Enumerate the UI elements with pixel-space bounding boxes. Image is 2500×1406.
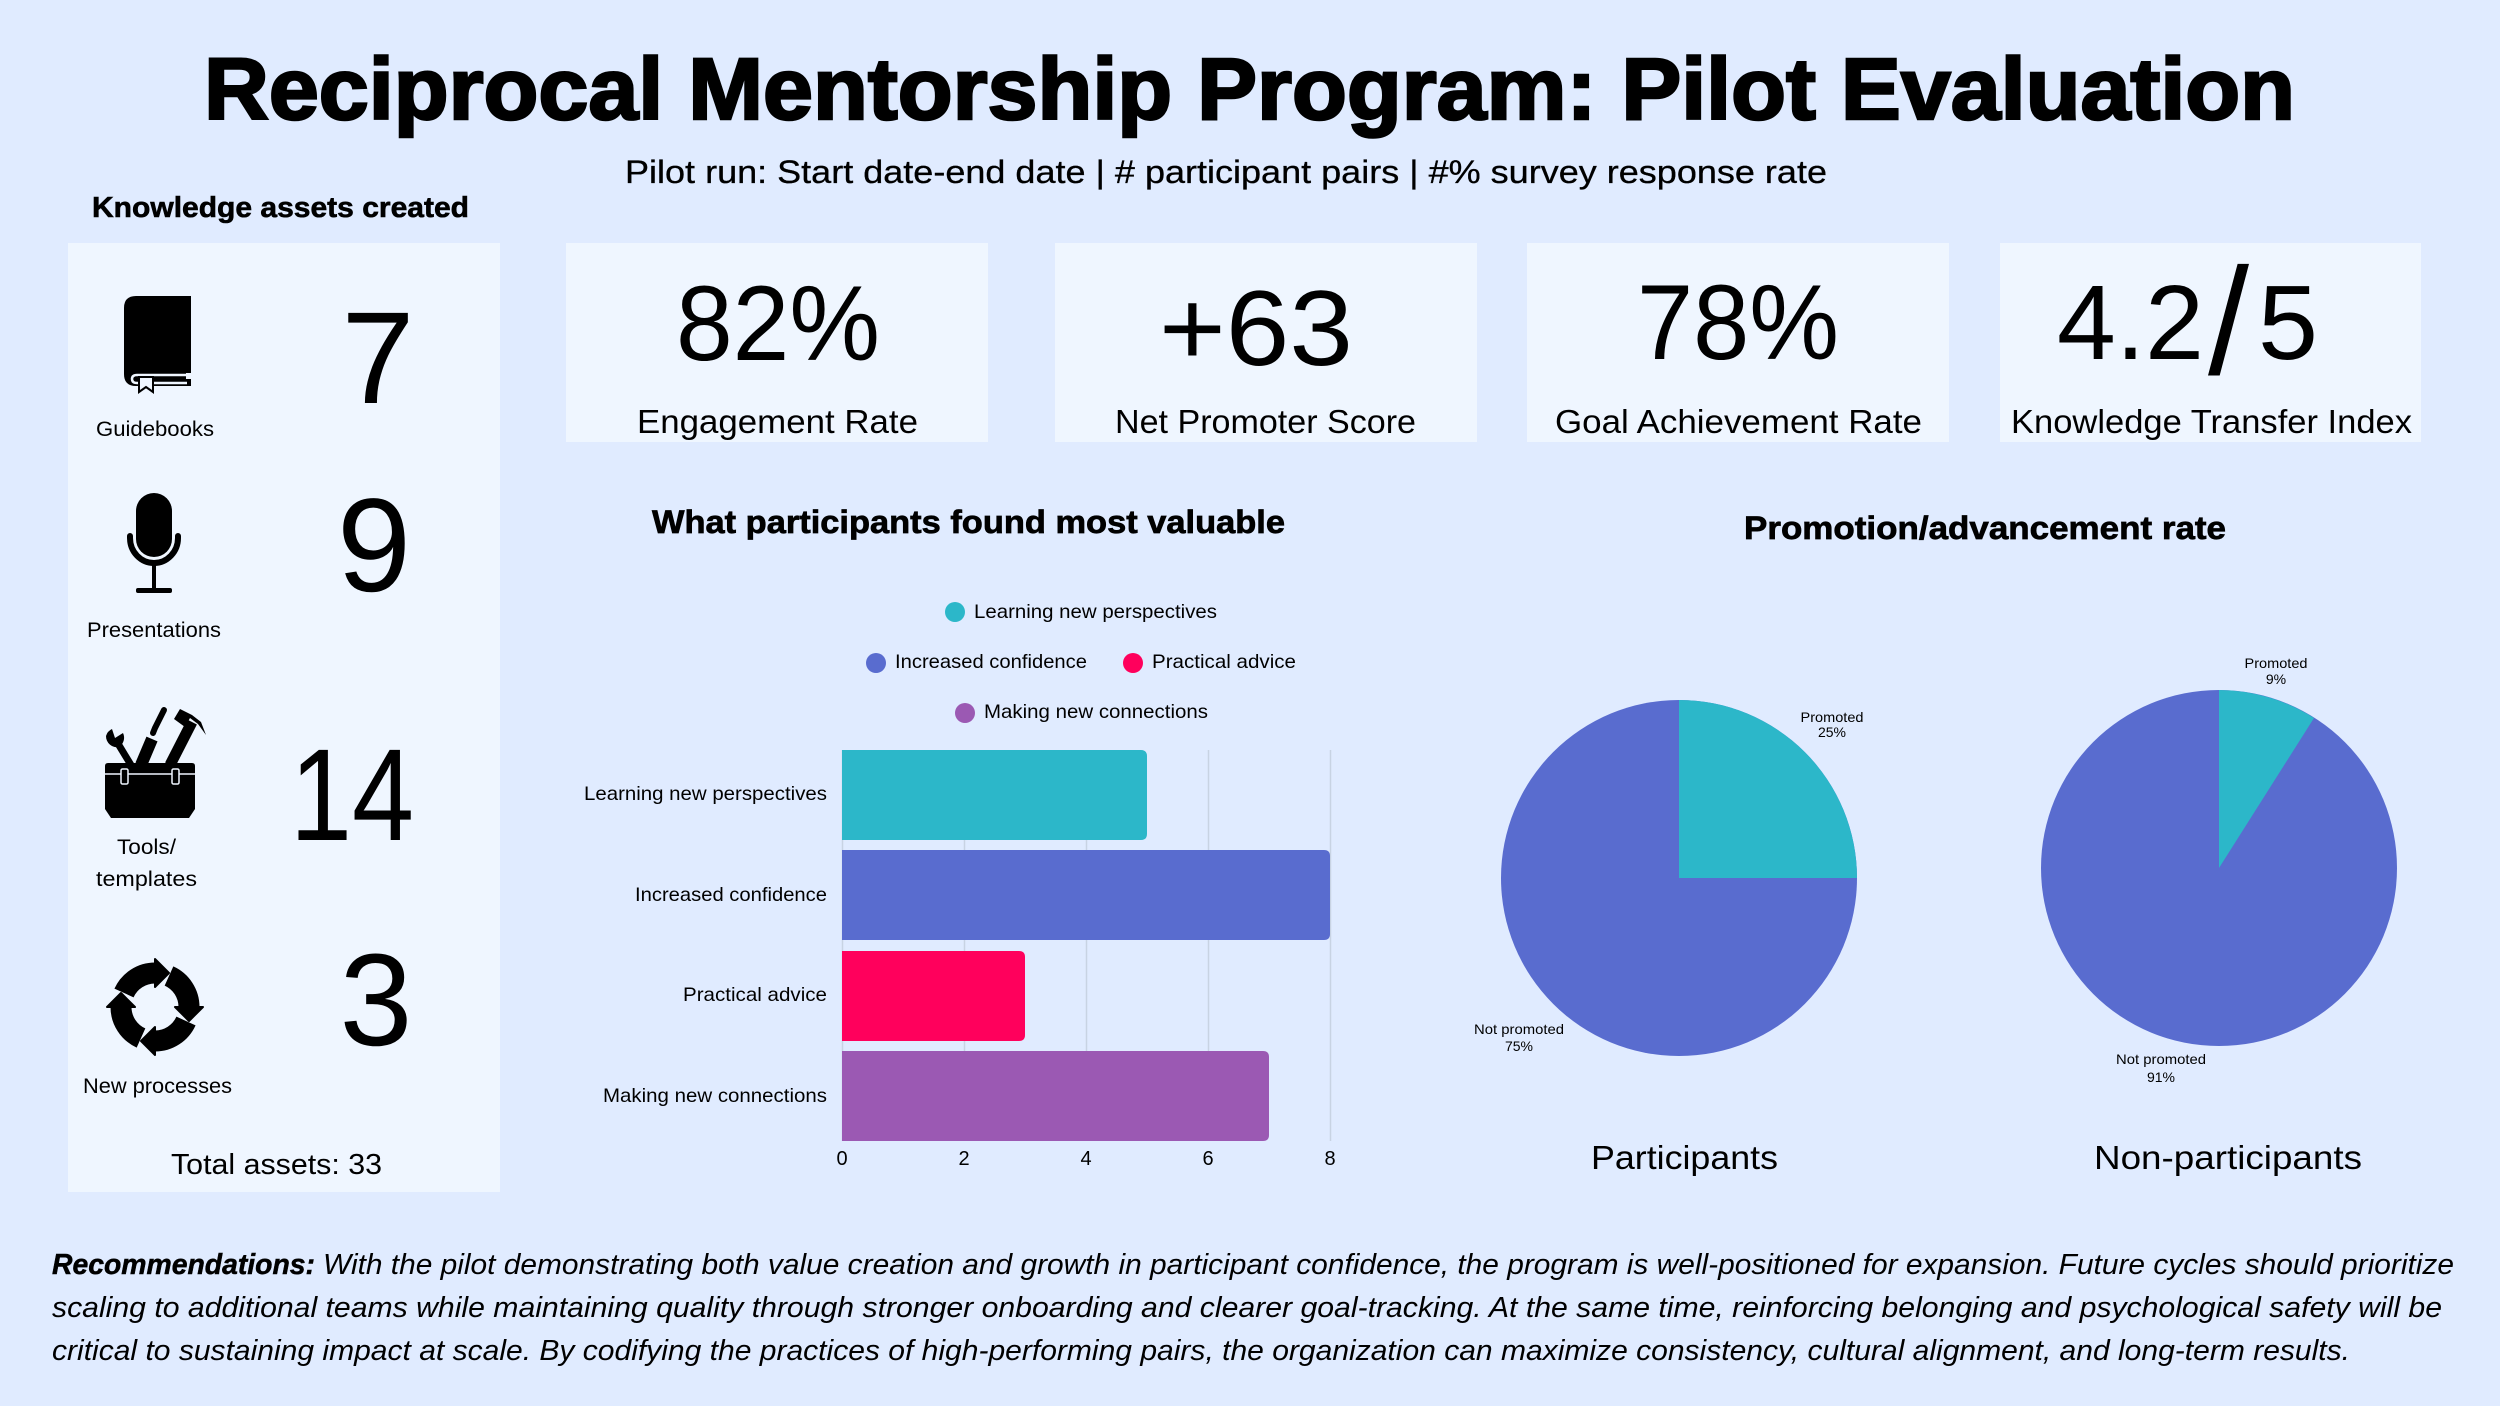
label: new processes: New processes [83,1075,232,1098]
KPI card: knowledge transfer index [2000,237,2421,442]
value: presentations: 9 [337,472,411,620]
icon: microphone [130,493,178,593]
subtitle: Pilot run: Start date-end date | # participant pairs | #% survey response rate [625,154,1827,190]
label: non-participants: Non-participants [2094,1139,2362,1176]
pie chart: non-participants: 9% [2266,671,2286,687]
KPI card: knowledge transfer index: / [2208,237,2250,407]
value: tools: 14 [290,721,414,868]
KPI card: goal achievement rate: Goal Achievement Rate [1555,403,1922,440]
bar: making new connections [842,1051,1269,1141]
value: new processes: 3 [340,926,412,1073]
icon: cycle arrows [107,959,203,1055]
bar chart: most valuable [584,601,1336,1170]
pie chart: participants: Promoted [1800,709,1864,725]
x axis labels: 6 [1202,1148,1214,1170]
total assets: Total assets: 33 [171,1149,382,1181]
recommendations text: Recommendations: [52,1249,315,1281]
label: tools/templates: Tools/ [117,836,176,859]
chart legend: Increased confidence [895,651,1087,673]
x axis labels: 2 [958,1148,970,1170]
category labels: Making new connections [603,1085,827,1107]
KPI card: engagement rate [566,243,988,442]
value: guidebooks: 7 [342,284,414,431]
KPI card: knowledge transfer index: 4.2 [2057,264,2204,382]
pie chart: non-participants: 91% [2147,1069,2175,1085]
icon: book [124,296,191,392]
x axis labels: 8 [1324,1148,1336,1170]
chart legend: Practical advice [1152,651,1296,673]
chart legend [866,601,1296,723]
x axis labels: 4 [1080,1148,1092,1170]
pie chart: participants: 75% [1505,1038,1533,1054]
x axis labels: 0 [836,1148,848,1170]
title: Reciprocal Mentorship Program: Pilot Evaluation [204,41,2295,138]
pie chart: non-participants: Not promoted [2116,1051,2206,1067]
recommendations text: scaling to additional teams while maintaining quality through stronger onboarding and clearer goal-tracking. At the same time, reinforcing belonging and psychological safety will be [52,1292,2442,1324]
label: tools/templates [96,836,197,891]
KPI card: net promoter score [1055,243,1477,442]
KPI card: knowledge transfer index: Knowledge Transfer Index [2011,403,2413,440]
label: presentations: Presentations [87,619,221,642]
pie chart: non-participants [2041,655,2397,1085]
recommendations text: With the pilot demonstrating both value creation and growth in participant confidence, the program is well-positioned for expansion. Future cycles should prioritize [323,1249,2454,1281]
KPI card: net promoter score: +63 [1159,268,1353,388]
bar: learning new perspectives [842,750,1147,840]
bar: practical advice [842,951,1025,1041]
heading: most valuable: What participants found most valuable [652,504,1285,540]
bar: increased confidence [842,850,1330,940]
recommendations text [52,1249,2454,1367]
label: tools/templates: templates [96,868,197,891]
KPI card: net promoter score: Net Promoter Score [1115,403,1416,440]
pie chart: participants: Not promoted [1474,1021,1564,1037]
icon: toolbox [105,709,206,818]
category labels: Increased confidence [635,884,827,906]
recommendations text: critical to sustaining impact at scale. By codifying the practices of high-performing pairs, the organization can maximize consistency, cultural alignment, and long-term results. [52,1335,2350,1367]
panel: knowledge assets [68,243,500,1192]
category labels: Practical advice [683,984,827,1006]
KPI card: goal achievement rate: 78% [1637,262,1839,382]
heading: promotion rate: Promotion/advancement rate [1744,510,2226,546]
chart legend: Making new connections [984,701,1208,723]
label: participants: Participants [1591,1139,1778,1176]
KPI card: goal achievement rate [1527,243,1949,442]
KPI card: knowledge transfer index: 5 [2258,264,2318,382]
x axis labels [836,1148,1336,1170]
category labels: Learning new perspectives [584,783,827,805]
chart legend: Learning new perspectives [974,601,1217,623]
heading: knowledge assets: Knowledge assets created [92,192,469,224]
pie chart: participants [1474,700,1864,1056]
category labels [584,783,827,1107]
label: guidebooks: Guidebooks [96,418,214,441]
KPI card: engagement rate: 82% [676,263,880,383]
KPI card: engagement rate: Engagement Rate [637,403,918,440]
pie chart: non-participants: Promoted [2244,655,2308,671]
pie chart: participants: 25% [1818,724,1846,740]
